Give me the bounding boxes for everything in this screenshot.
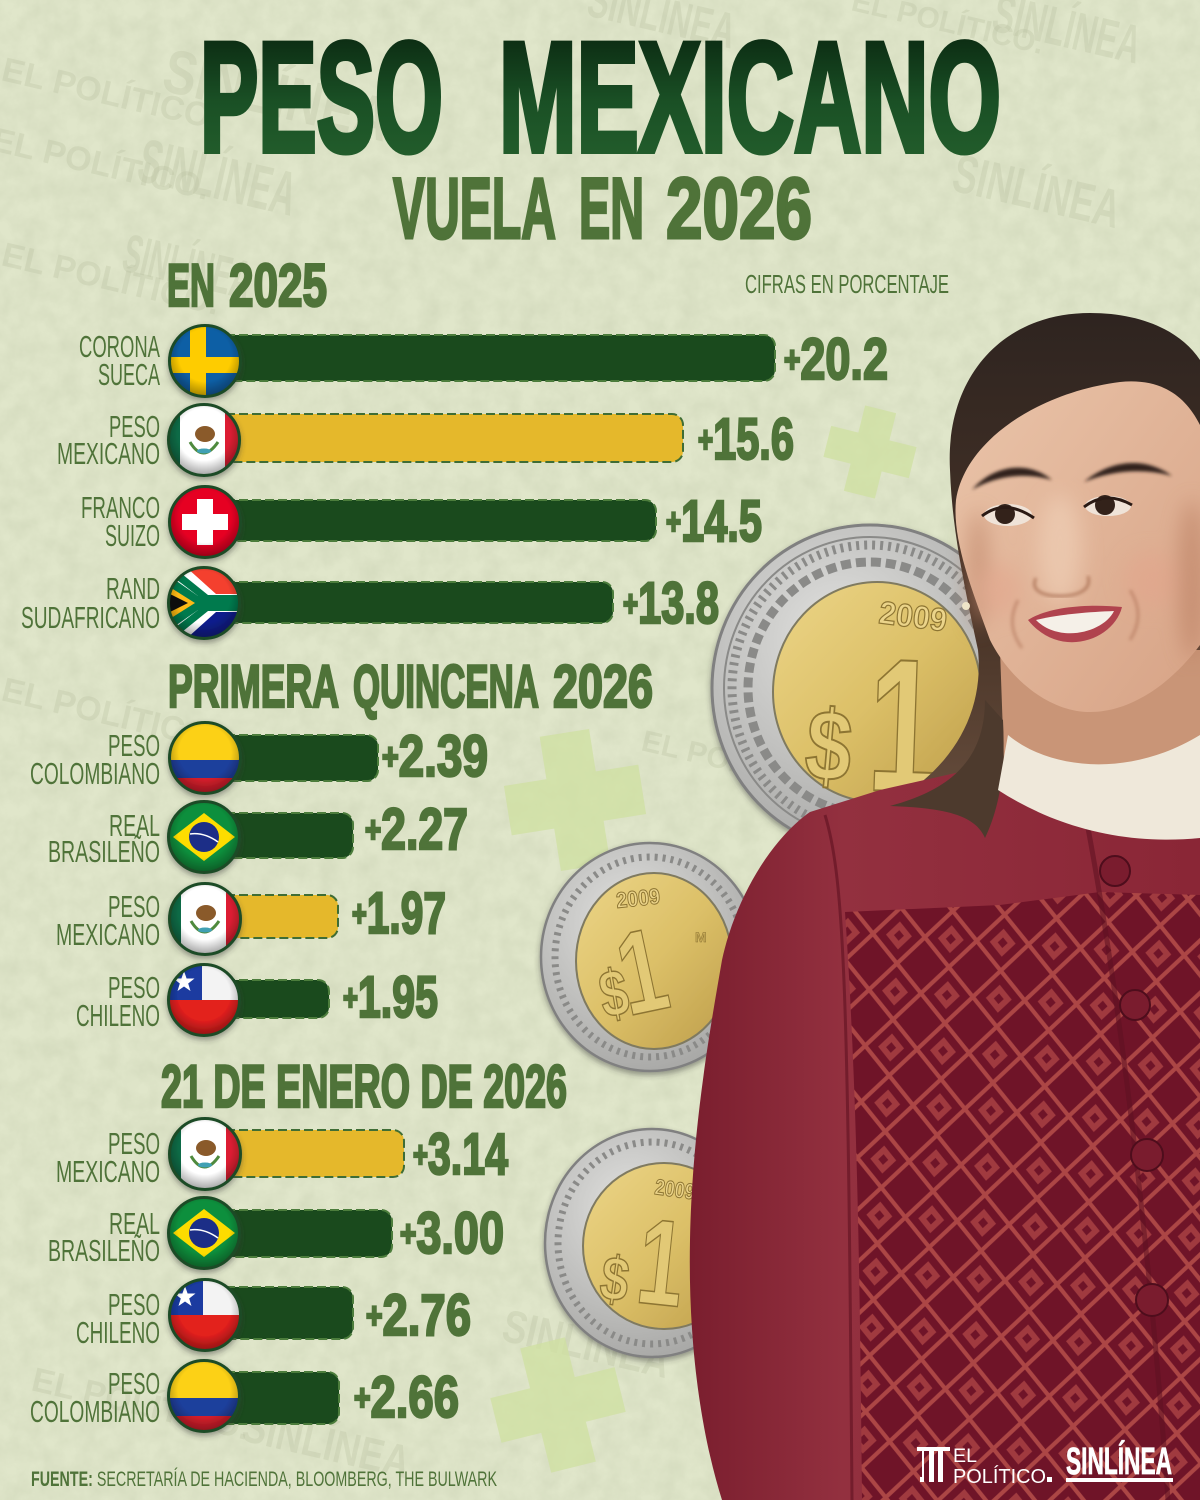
row: peso colombiano: PESO — [108, 728, 160, 763]
medium coin: $ — [594, 954, 634, 1032]
row: peso mexicano: MEXICANO — [56, 1154, 160, 1189]
small coin — [545, 1129, 759, 1357]
row: peso mexicano: PESO — [109, 409, 160, 444]
row: real brasileño: REAL — [109, 1206, 160, 1241]
row: peso chileno: PESO — [108, 970, 160, 1005]
eyes — [982, 495, 1132, 526]
medium coin: 2009 — [615, 884, 661, 913]
row: peso mexicano — [56, 1118, 508, 1190]
subtitle: VUELA — [393, 161, 556, 257]
row: corona sueca: SUECA — [98, 357, 160, 392]
white turtleneck — [998, 735, 1200, 840]
smile lines — [1012, 590, 1138, 648]
row: peso mexicano: MEXICANO — [56, 917, 160, 952]
section: en 2025 — [21, 252, 888, 639]
medium coin — [541, 843, 759, 1071]
watermark logos: SINLÍNEA — [947, 143, 1126, 240]
row: real brasileño: + — [365, 809, 381, 850]
row: real brasileño: BRASILEÑO — [48, 834, 160, 869]
row: peso colombiano: PESO — [108, 1366, 160, 1401]
small coin: 1 — [631, 1193, 691, 1333]
row: peso mexicano: 3.14 — [428, 1122, 508, 1187]
row: franco suizo — [81, 486, 762, 558]
section: primera quincena 2026 — [30, 653, 653, 1036]
row: rand sudafricano — [21, 567, 719, 639]
row: peso chileno: + — [366, 1295, 382, 1336]
title: PESO — [200, 11, 443, 185]
row: peso colombiano: 2.39 — [399, 724, 488, 789]
row: corona sueca: + — [784, 339, 800, 380]
face — [955, 381, 1200, 712]
green plus decorations — [480, 399, 923, 1483]
row: real brasileño: 3.00 — [416, 1201, 504, 1266]
row: real brasileño: REAL — [109, 808, 160, 843]
small coin: 2009 — [653, 1174, 696, 1205]
portrait: woman in burgundy jacket — [690, 313, 1200, 1500]
watermark logos: SINLÍNEA — [157, 36, 396, 155]
heading: primera quincena: PRIMERA — [168, 653, 339, 720]
row: peso mexicano: PESO — [108, 889, 160, 924]
row: peso colombiano — [30, 722, 488, 794]
heading: primera quincena: QUINCENA — [353, 653, 539, 720]
jacket woven panel — [845, 892, 1200, 1500]
smile — [1028, 606, 1122, 642]
row: franco suizo: + — [666, 501, 681, 542]
logo: el politico: POLÍTICO — [953, 1465, 1046, 1488]
heading: 21 de enero: 21 DE ENERO DE 2026 — [161, 1053, 567, 1120]
row: peso chileno — [76, 1279, 471, 1351]
logo: el politico — [917, 1446, 1052, 1488]
small coin: $ — [596, 1244, 633, 1316]
watermark logos: SINLÍNEA — [132, 126, 303, 230]
row: peso colombiano: COLOMBIANO — [30, 756, 160, 791]
source line: FUENTE: SECRETARÍA DE HACIENDA, BLOOMBERG, THE BULWARK — [31, 1468, 497, 1491]
neck — [1000, 650, 1200, 790]
row: real brasileño: BRASILEÑO — [48, 1233, 160, 1268]
watermark logos: SINLÍNEA — [117, 223, 257, 311]
subtitle: EN — [579, 161, 644, 257]
watermark logos: EL POLÍTICO. — [638, 724, 837, 801]
medium coin: M — [695, 929, 707, 945]
row: corona sueca: CORONA — [79, 329, 160, 364]
row: franco suizo: FRANCO — [81, 490, 160, 525]
logo: el politico: EL — [953, 1446, 977, 1467]
row: peso mexicano: + — [352, 893, 367, 934]
row: peso chileno: CHILENO — [76, 1315, 160, 1350]
large coin — [712, 525, 1028, 851]
large coin: 1 — [865, 619, 942, 833]
row: peso chileno: + — [343, 977, 358, 1018]
row: peso colombiano: COLOMBIANO — [30, 1394, 160, 1429]
row: rand sudafricano: + — [623, 583, 638, 624]
watermark logos: EL POLÍTICO. — [0, 51, 223, 138]
row: peso mexicano: 1.97 — [367, 881, 446, 946]
large coin: $ — [801, 688, 857, 804]
row: peso chileno: PESO — [108, 1287, 160, 1322]
heading: primera quincena — [168, 653, 653, 720]
watermark logos: EL POLÍTICO. — [28, 1361, 253, 1448]
row: peso chileno: 1.95 — [358, 965, 438, 1030]
hair strands over shoulder — [890, 700, 1004, 838]
eyebrows — [972, 463, 1172, 490]
row: rand sudafricano: SUDAFRICANO — [21, 600, 160, 635]
row: franco suizo: 14.5 — [681, 489, 762, 554]
row: peso colombiano: + — [382, 736, 399, 777]
row: peso mexicano — [57, 404, 794, 476]
title — [200, 11, 1001, 185]
row: real brasileño — [48, 1197, 504, 1269]
heading: en 2025 — [167, 252, 327, 319]
heading: primera quincena: 2026 — [553, 653, 653, 720]
subtitle: 2026 — [666, 161, 812, 257]
hair back and ponytail — [885, 313, 1200, 838]
large coin: 2009 — [877, 594, 949, 638]
row: peso mexicano: + — [413, 1134, 428, 1175]
row: rand sudafricano: 13.8 — [638, 571, 719, 636]
nose — [1034, 576, 1089, 596]
row: real brasileño — [48, 797, 468, 873]
row: peso mexicano: + — [698, 419, 713, 460]
subtitle — [393, 161, 812, 257]
watermark logos: SINLÍNEA — [238, 1399, 415, 1488]
jacket placket seam — [1088, 828, 1168, 1500]
sleeve seam — [825, 815, 852, 1500]
heading: en 2025: EN — [167, 252, 215, 319]
section: 21 de enero de 2026 — [30, 1053, 567, 1432]
row: peso colombiano: 2.66 — [370, 1365, 459, 1430]
buttons — [1100, 856, 1168, 1316]
row: peso colombiano — [30, 1360, 459, 1432]
row: peso mexicano: 15.6 — [713, 407, 794, 472]
watermark logos: EL POLÍTICO. — [0, 671, 223, 758]
row: corona sueca: 20.2 — [800, 327, 888, 392]
row: real brasileño: 2.27 — [381, 797, 468, 862]
row: rand sudafricano: RAND — [106, 571, 160, 606]
watermark logos: SINLÍNEA — [498, 1299, 675, 1388]
jacket — [690, 772, 1200, 1500]
cheek shading — [968, 495, 1200, 660]
row: peso colombiano: + — [354, 1377, 370, 1418]
row: peso mexicano: MEXICANO — [57, 436, 160, 471]
row: peso chileno: 2.76 — [382, 1283, 471, 1348]
medium coin: 1 — [606, 903, 678, 1041]
earring — [962, 602, 970, 610]
row: peso chileno — [76, 964, 438, 1036]
heading: en 2025: 2025 — [229, 252, 327, 319]
row: peso chileno: CHILENO — [76, 998, 160, 1033]
row: corona sueca — [79, 325, 888, 397]
row: franco suizo: SUIZO — [105, 518, 160, 553]
row: real brasileño: + — [400, 1213, 416, 1254]
row: peso mexicano — [56, 881, 446, 955]
watermark logos: EL POLÍTICO. — [0, 236, 223, 323]
note: units: CIFRAS EN PORCENTAJE — [745, 269, 949, 299]
row: peso mexicano: PESO — [108, 1126, 160, 1161]
